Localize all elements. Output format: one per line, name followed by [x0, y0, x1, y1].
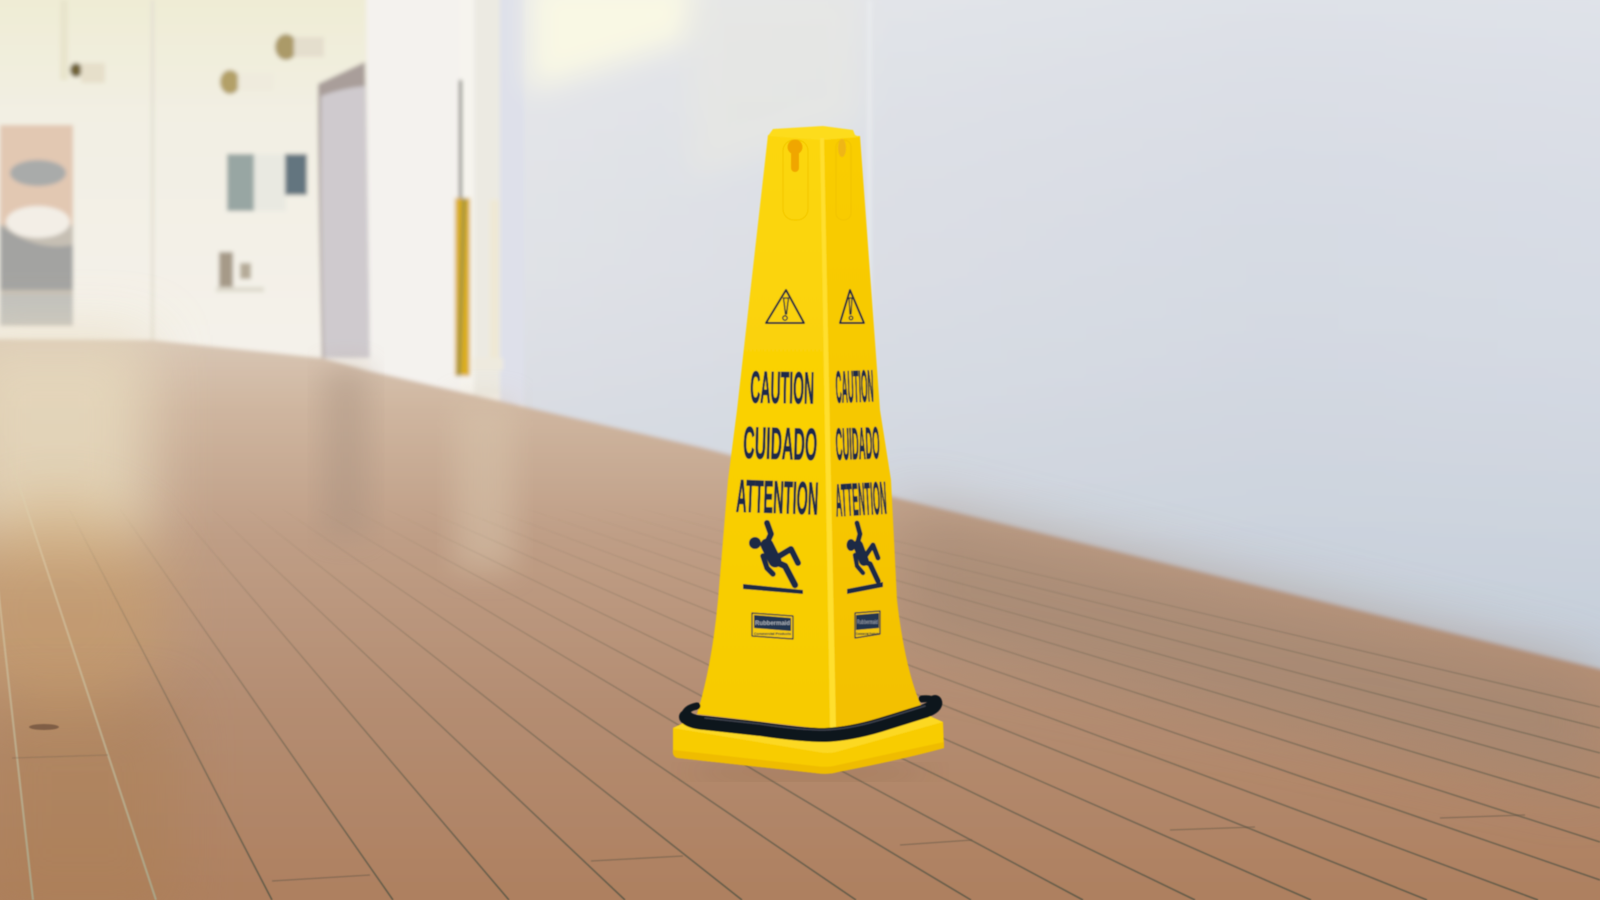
lower left tone [0, 700, 180, 900]
cone right face [822, 136, 922, 730]
yellow pole and chain [455, 80, 470, 376]
panel seam [151, 0, 154, 340]
wall sign [382, 118, 404, 192]
key slot left [783, 140, 808, 220]
golden glare [0, 500, 170, 720]
wall lamps [60, 0, 444, 94]
caution cone: CAUTION [750, 361, 815, 414]
cone contact shadow [685, 766, 935, 778]
caution cone: ATTENTION [736, 470, 819, 524]
Rubbermaid logo left: Rubbermaid [755, 620, 790, 627]
white wall beside door [366, 0, 460, 392]
warning triangle right [840, 290, 864, 323]
key slot right [836, 139, 851, 220]
Rubbermaid logo right: Commercial Products [856, 632, 879, 636]
Rubbermaid logo left [752, 613, 793, 639]
right wall [524, 0, 1600, 670]
floor plank lines [0, 337, 1600, 900]
floor scuff mark [29, 724, 59, 730]
cone corner highlight [820, 138, 836, 729]
door reflection [322, 368, 370, 538]
grey electrical boxes [227, 154, 307, 211]
caution cone: CUIDADO [835, 417, 880, 470]
Rubbermaid logo right: Rubbermaid [857, 620, 878, 626]
plank end joints [12, 755, 1525, 881]
floor bar left [743, 584, 803, 594]
bright reflection on wall [530, 0, 700, 90]
slipping figure left [749, 523, 798, 585]
cone left face [697, 135, 832, 730]
doorway [318, 62, 370, 358]
Rubbermaid logo left: Commercial Products [754, 631, 792, 636]
cone base [673, 714, 944, 774]
floor [0, 339, 1600, 900]
caution cone: CUIDADO [743, 417, 818, 470]
floor reflections [0, 335, 1600, 900]
floor bar right [847, 582, 883, 594]
cone top cap [768, 126, 860, 140]
pole reflection [455, 400, 515, 570]
Rubbermaid logo right [855, 611, 880, 638]
window panel [0, 125, 73, 326]
caution cone: CAUTION [835, 360, 874, 413]
warning triangle left [766, 290, 804, 323]
left reflection band [0, 335, 150, 550]
wall side floor tone [898, 505, 1600, 790]
caution cone [673, 126, 944, 774]
corridor column [460, 0, 474, 395]
photo scene: caution cone in corridor: ATTENTION [834, 472, 888, 526]
slipping figure right [846, 523, 878, 581]
wall bracket [216, 252, 264, 292]
black rubber ring [684, 699, 935, 735]
